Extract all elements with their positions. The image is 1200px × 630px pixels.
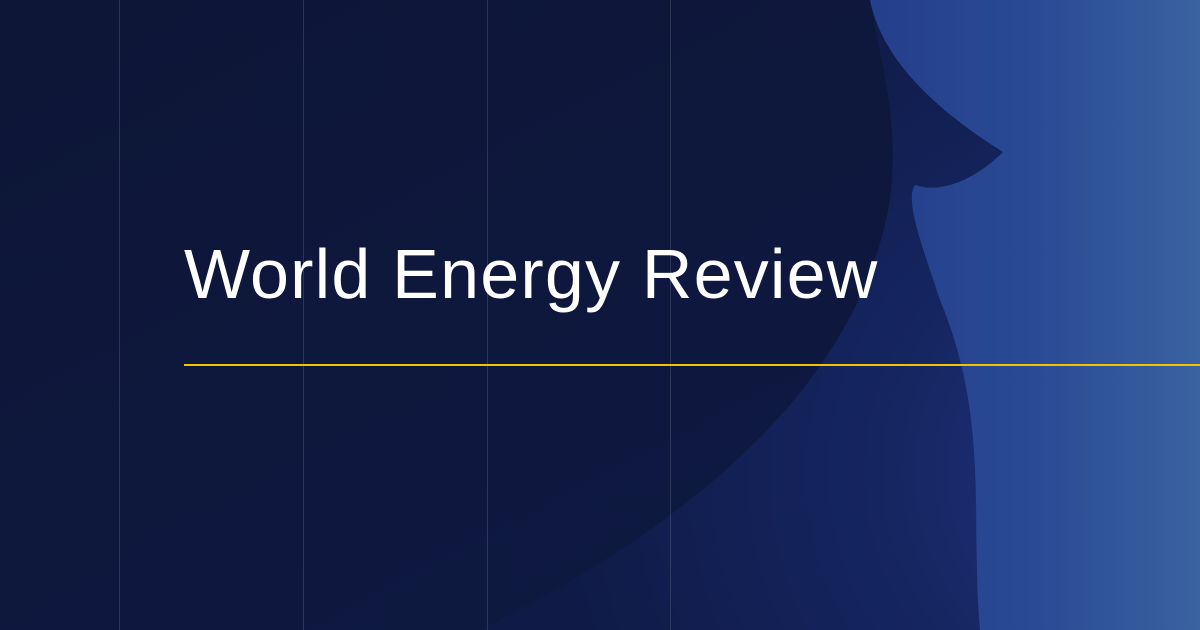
vertical lines — [120, 0, 670, 630]
right blue shape — [870, 0, 1200, 630]
yellow rule — [184, 364, 1200, 366]
title: World Energy Review — [184, 235, 879, 313]
large curve — [480, 0, 1200, 630]
